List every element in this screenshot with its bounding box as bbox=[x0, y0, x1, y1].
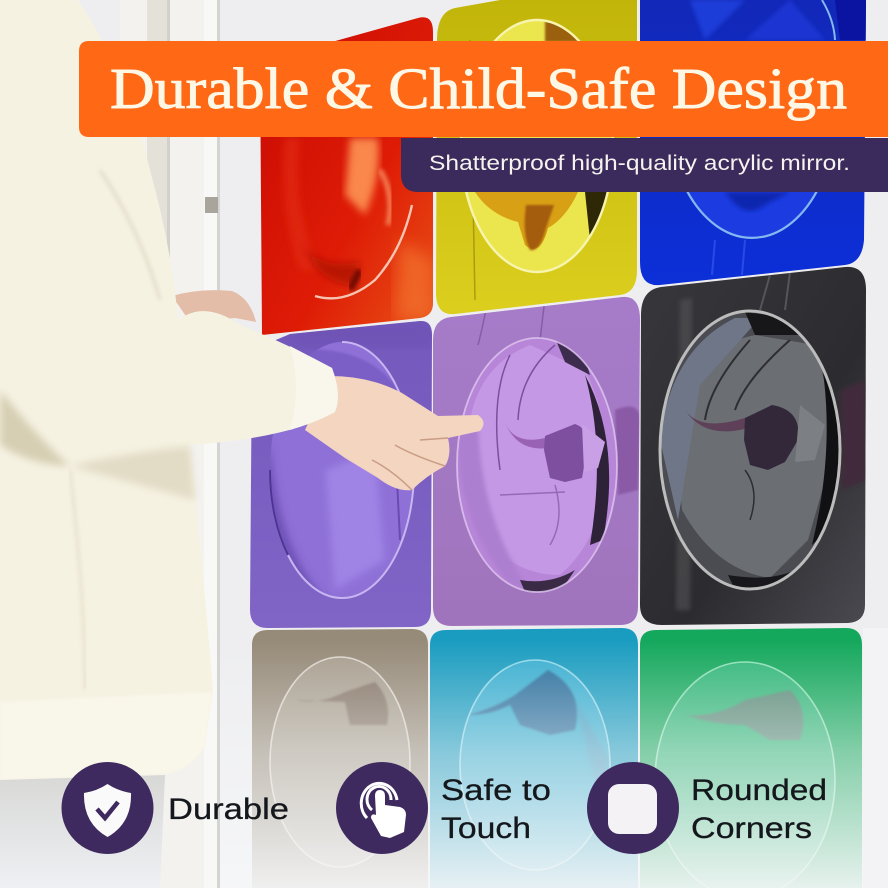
feature: safe to touch bbox=[336, 762, 551, 854]
mirror tile: teal bbox=[428, 626, 640, 888]
mirror tile: green bbox=[638, 626, 864, 888]
mirror tile: violet bbox=[245, 315, 435, 630]
trousers bbox=[0, 775, 165, 888]
bottom white fade bbox=[220, 640, 888, 888]
title banner bbox=[79, 41, 888, 137]
title banner: Durable & Child-Safe Design bbox=[110, 56, 847, 121]
door frame bbox=[120, 0, 220, 888]
pointing hand bbox=[305, 376, 484, 490]
feature: safe to touch: Safe to bbox=[441, 774, 551, 807]
icon: tapping hand bbox=[336, 762, 428, 854]
subtitle banner: Shatterproof high-quality acrylic mirror. bbox=[429, 152, 850, 175]
hoodie body bbox=[0, 0, 338, 780]
feature: rounded corners: Corners bbox=[691, 812, 812, 845]
icon: shield bbox=[62, 762, 154, 854]
figure: cream hoodie and hands bbox=[0, 0, 484, 888]
mirror tile: dark bbox=[636, 262, 868, 627]
icon: rounded square bbox=[587, 762, 679, 854]
shadow folds bbox=[0, 390, 70, 466]
mirror tile: beige bbox=[250, 628, 430, 888]
mirror tile: yellow bbox=[430, 0, 640, 320]
feature: safe to touch: Touch bbox=[441, 812, 531, 845]
feature: durable: Durable bbox=[168, 793, 289, 826]
sleeve cuff bbox=[290, 346, 338, 430]
feature: rounded corners bbox=[587, 762, 827, 854]
hoodie hem bbox=[0, 692, 212, 780]
feature: durable bbox=[62, 762, 289, 854]
mirror tile: lilac bbox=[430, 290, 642, 630]
feature: rounded corners: Rounded bbox=[691, 774, 827, 807]
mirror tile: blue bbox=[636, 0, 868, 290]
mirror tile: red bbox=[255, 10, 435, 340]
subtitle banner bbox=[401, 138, 888, 192]
far hand bbox=[172, 290, 256, 322]
